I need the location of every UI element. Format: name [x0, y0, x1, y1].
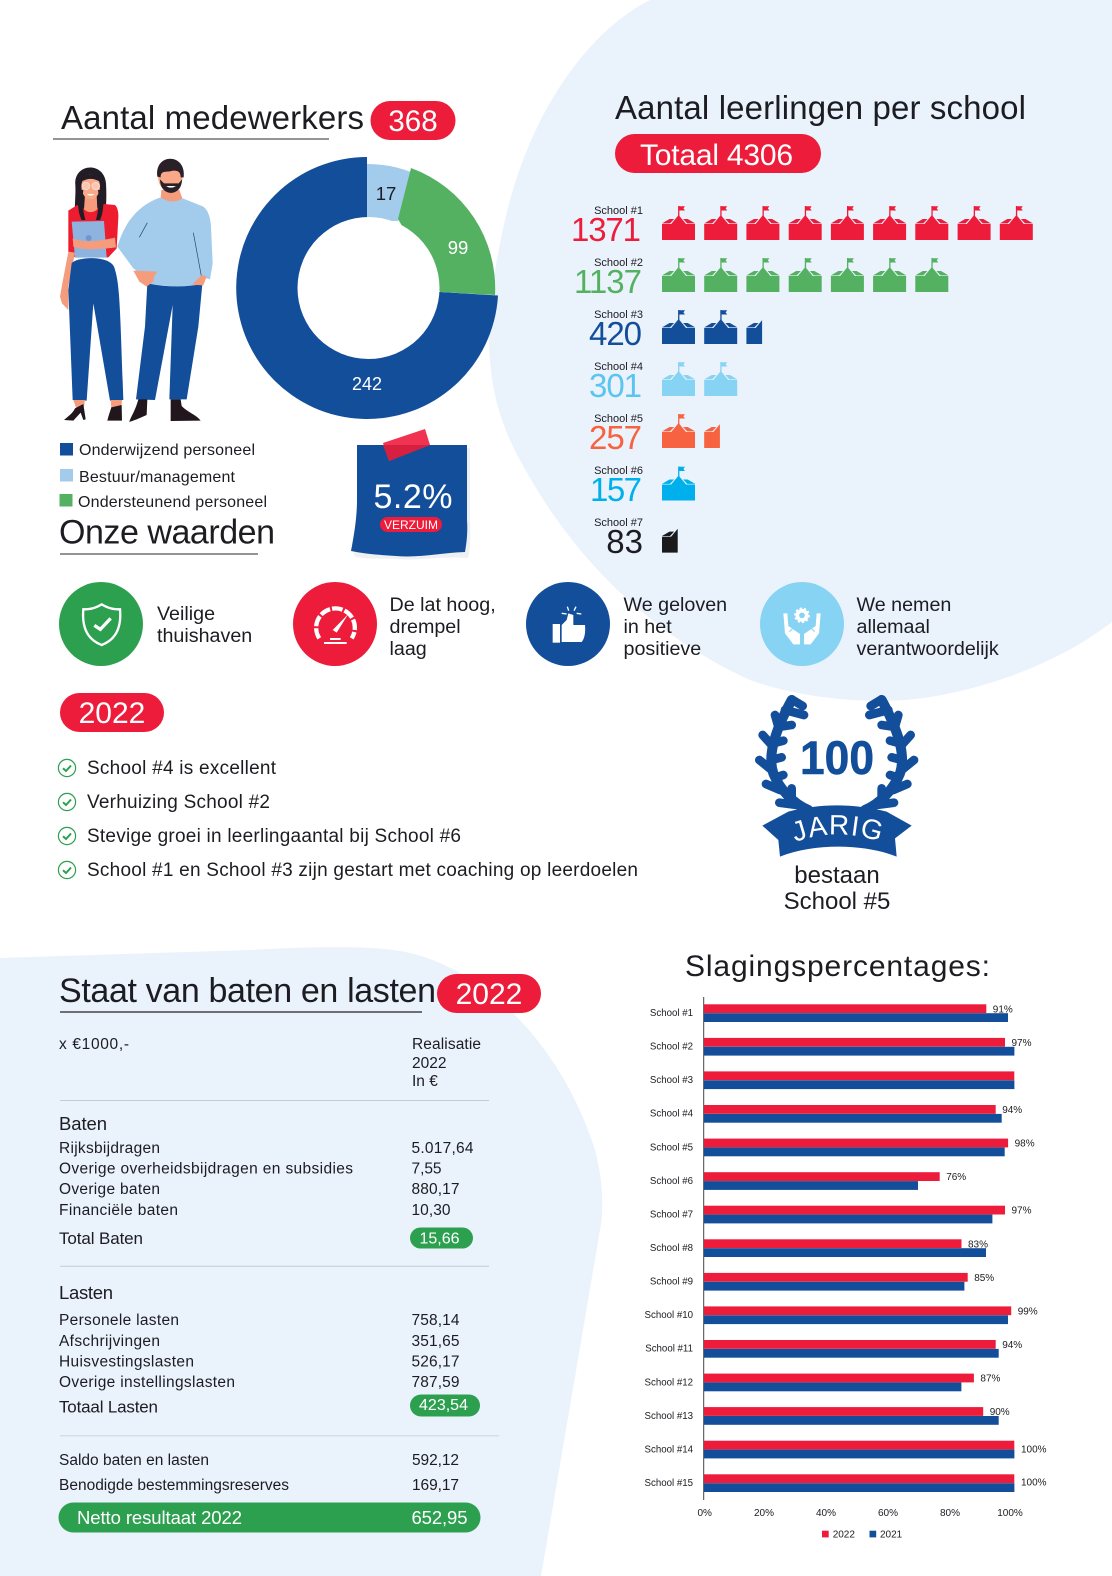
heading: staat van baten en lasten: Staat van baten en lasten — [59, 972, 436, 1010]
section: lasten: Overige instellingslasten — [59, 1374, 235, 1391]
section: saldo: Benodigde bestemmingsreserves — [59, 1477, 289, 1494]
laurel left — [759, 699, 808, 810]
value: veilige thuishaven — [59, 582, 252, 666]
section: lasten — [59, 1282, 480, 1416]
badge: 2022: 2022 — [79, 697, 145, 730]
value: we geloven in het positieve — [526, 582, 727, 666]
value: de lat hoog: drempel — [390, 616, 461, 638]
result bar: netto resultaat: 652,95 — [412, 1507, 468, 1528]
value: we geloven in het positieve: positieve — [624, 638, 701, 660]
value: we geloven in het positieve: We geloven — [624, 594, 727, 616]
x axis labels — [697, 1508, 1023, 1519]
heading: aantal leerlingen per school: Aantal leerlingen per school — [615, 89, 1026, 126]
section: baten: Total Baten — [59, 1229, 143, 1248]
donut hole — [298, 217, 440, 359]
pictogram row: school 3: 420 — [589, 315, 642, 352]
section: lasten: 351,65 — [412, 1333, 460, 1350]
badge: 100 jarig: JARIG — [794, 815, 882, 841]
badge: 2022: 2022 — [456, 978, 522, 1011]
row labels: School #13 — [645, 1411, 693, 1422]
row labels: School #5 — [650, 1142, 693, 1153]
pictogram row: school 7: 83 — [606, 523, 643, 560]
section: saldo: 169,17 — [412, 1477, 459, 1494]
section: lasten: Afschrijvingen — [59, 1333, 160, 1350]
value: we nemen allemaal verantwoordelijk: allemaal — [856, 616, 930, 638]
man — [117, 159, 213, 422]
badge: 368: 368 — [388, 105, 438, 138]
value labels: 94% — [1002, 1105, 1022, 1116]
section: lasten: Huisvestingslasten — [59, 1354, 194, 1370]
section: baten: 880,17 — [412, 1181, 460, 1198]
list item: Stevige groei in leerlingaantal bij School #6 — [87, 826, 461, 847]
icon: thumbs up — [526, 582, 610, 666]
section: baten: 7,55 — [412, 1160, 442, 1178]
row labels: School #7 — [650, 1209, 693, 1220]
value labels: 100% — [1021, 1478, 1047, 1488]
list: highlights 2022 — [58, 758, 638, 881]
value labels: 99% — [1018, 1306, 1038, 1317]
row labels: School #10 — [645, 1310, 694, 1321]
pill: total baten — [410, 1228, 473, 1248]
section: saldo — [59, 1452, 459, 1494]
badge: totaal 4306 — [615, 134, 821, 173]
row labels: School #3 — [650, 1075, 693, 1086]
pictogram row: school 6: School #6 — [594, 465, 643, 477]
section: lasten: 526,17 — [412, 1354, 460, 1370]
chart legend: 2022 — [833, 1529, 855, 1540]
pictogram row: school 1 — [571, 205, 1033, 248]
pictogram row: school 5 — [589, 413, 720, 456]
pictogram row: school 2: School #2 — [594, 257, 643, 269]
icon: hands with flower — [760, 582, 844, 666]
value labels: 100% — [1021, 1445, 1047, 1456]
value: veilige thuishaven: Veilige — [157, 603, 215, 625]
value labels: 98% — [1015, 1139, 1035, 1150]
row labels: School #8 — [650, 1243, 693, 1254]
section: baten — [59, 1113, 474, 1248]
pictogram row: school 6: 157 — [590, 471, 642, 508]
table header: x €1000,- — [59, 1036, 129, 1053]
pictogram row: school 2: 1137 — [574, 263, 642, 300]
value labels: 94% — [1002, 1340, 1022, 1351]
icon: shield — [59, 582, 143, 666]
section: lasten: 758,14 — [412, 1312, 460, 1329]
badge: totaal 4306: Totaal 4306 — [640, 139, 793, 172]
pill: totaal lasten — [410, 1394, 480, 1416]
section: lasten: Totaal Lasten — [59, 1398, 158, 1416]
value: we nemen allemaal verantwoordelijk: We nemen — [856, 594, 951, 616]
x axis labels: 100% — [997, 1508, 1023, 1519]
value labels: 97% — [1012, 1206, 1032, 1217]
donut chart: personeel — [236, 157, 498, 419]
badge: 100 jarig — [755, 695, 918, 915]
pictogram row: school 5: 257 — [589, 419, 642, 456]
badge: 2022 — [60, 693, 164, 732]
section: baten: 10,30 — [412, 1202, 451, 1219]
section: baten: Overige baten — [59, 1181, 160, 1198]
laurel right — [865, 699, 914, 810]
chart legend: 2021 — [880, 1529, 903, 1540]
table header — [59, 1036, 481, 1090]
table header: In € — [412, 1073, 438, 1090]
sticky note: verzuim 5.2% — [351, 429, 470, 559]
row labels: School #11 — [645, 1344, 693, 1355]
value: de lat hoog: laag — [390, 638, 427, 660]
section: baten: Financiële baten — [59, 1202, 178, 1219]
pill: total baten: 15,66 — [419, 1230, 460, 1248]
result bar: netto resultaat: Netto resultaat 2022 — [77, 1507, 242, 1528]
section: lasten: Personele lasten — [59, 1312, 179, 1329]
row labels: School #2 — [650, 1042, 693, 1053]
value 17: 17 — [376, 183, 396, 204]
value labels: 90% — [990, 1407, 1010, 1418]
value 99: 99 — [448, 237, 468, 258]
badge: 368 — [370, 101, 456, 140]
row labels: School #1 — [650, 1008, 693, 1019]
woman — [60, 168, 123, 421]
value: we nemen allemaal verantwoordelijk: verantwoordelijk — [856, 638, 999, 660]
bars 2022 — [704, 1004, 1014, 1483]
illustration: two staff members — [60, 159, 213, 422]
heading: aantal medewerkers: Aantal medewerkers — [61, 99, 364, 136]
value 242: 242 — [352, 374, 382, 394]
section: baten: Rijksbijdragen — [59, 1140, 160, 1157]
section: lasten: Lasten — [59, 1282, 113, 1303]
badge: 100 jarig: School #5 — [784, 888, 890, 915]
pictogram row: school 7 — [594, 517, 678, 560]
pictogram row: school 4: School #4 — [594, 361, 643, 373]
x axis labels: 20% — [754, 1508, 774, 1519]
x axis labels: 40% — [816, 1508, 836, 1519]
heading: aantal medewerkers — [53, 99, 456, 140]
legend: personeel — [60, 442, 267, 511]
badge: 100 jarig: bestaan — [794, 862, 880, 889]
x axis labels: 60% — [878, 1508, 898, 1519]
sticky note: verzuim 5.2%: 5.2% — [374, 478, 452, 516]
pictogram row: school 7: School #7 — [594, 517, 643, 529]
value: de lat hoog — [293, 582, 496, 666]
section: saldo: Saldo baten en lasten — [59, 1452, 209, 1469]
heading: onze waarden: Onze waarden — [59, 514, 275, 552]
badge: 2022 — [437, 974, 541, 1013]
row labels: School #4 — [650, 1109, 694, 1120]
pictogram row: school 6 — [590, 465, 695, 508]
table header: 2022 — [412, 1055, 446, 1072]
section: baten: 5.017,64 — [412, 1140, 474, 1157]
chart legend — [822, 1529, 903, 1540]
pictogram row: school 4 — [589, 361, 737, 404]
list item: School #4 is excellent — [87, 758, 277, 779]
segment: ondersteunend personeel — [398, 168, 495, 295]
row labels — [645, 1008, 694, 1489]
ribbon — [762, 805, 912, 857]
badge: 100 jarig: 100 — [800, 731, 874, 784]
pictogram row: school 3 — [589, 309, 762, 352]
result bar: netto resultaat — [58, 1502, 480, 1532]
heading: slagingspercentages: Slagingspercentages: — [685, 950, 990, 983]
value: veilige thuishaven: thuishaven — [157, 625, 252, 647]
section: baten: Overige overheidsbijdragen en subsidies — [59, 1160, 353, 1178]
icon: speedometer — [293, 582, 377, 666]
table: baten en lasten — [58, 1036, 499, 1532]
background shape: top right — [489, 0, 1112, 701]
row labels: School #15 — [645, 1478, 693, 1489]
value labels: 87% — [980, 1374, 1001, 1385]
section: baten: Baten — [59, 1113, 107, 1134]
pictogram row: school 5: School #5 — [594, 413, 643, 425]
pictogram row: school 2 — [574, 257, 948, 300]
section: lasten: 787,59 — [412, 1374, 460, 1391]
value: de lat hoog: De lat hoog, — [390, 594, 496, 616]
value: we nemen allemaal verantwoordelijk — [760, 582, 999, 666]
segment: bestuur management — [367, 164, 411, 221]
pictogram row: school 4: 301 — [589, 367, 642, 404]
pictogram row: school 3: School #3 — [594, 309, 643, 321]
value labels: 91% — [993, 1004, 1013, 1015]
value labels: 76% — [946, 1172, 966, 1183]
sticky note: verzuim 5.2%: VERZUIM — [384, 518, 438, 532]
list item: Verhuizing School #2 — [87, 792, 270, 813]
table header: Realisatie — [412, 1036, 481, 1053]
legend: personeel: Onderwijzend personeel — [79, 442, 255, 459]
value labels — [946, 1004, 1047, 1488]
row labels: School #9 — [650, 1277, 693, 1288]
bars 2021 — [704, 1013, 1014, 1492]
pill: totaal lasten: 423,54 — [419, 1397, 468, 1414]
legend: personeel: Bestuur/management — [79, 469, 236, 486]
value: we geloven in het positieve: in het — [624, 616, 672, 638]
row labels: School #6 — [650, 1176, 693, 1187]
legend: personeel: Ondersteunend personeel — [78, 494, 267, 511]
row labels: School #12 — [645, 1377, 693, 1388]
x axis labels: 80% — [940, 1508, 960, 1519]
pictogram row: school 1: 1371 — [571, 211, 641, 248]
background shape: bottom left — [0, 947, 602, 1576]
value labels: 97% — [1012, 1038, 1032, 1049]
x axis labels: 0% — [697, 1508, 712, 1519]
row labels: School #14 — [645, 1444, 694, 1455]
value labels: 85% — [974, 1273, 994, 1284]
segment: onderwijzend personeel — [236, 157, 498, 419]
pictogram row: school 1: School #1 — [594, 205, 643, 217]
value labels: 83% — [968, 1239, 988, 1250]
section: saldo: 592,12 — [412, 1452, 459, 1469]
bar chart: slagingspercentages — [645, 997, 1047, 1540]
list item: School #1 en School #3 zijn gestart met coaching op leerdoelen — [87, 860, 638, 881]
